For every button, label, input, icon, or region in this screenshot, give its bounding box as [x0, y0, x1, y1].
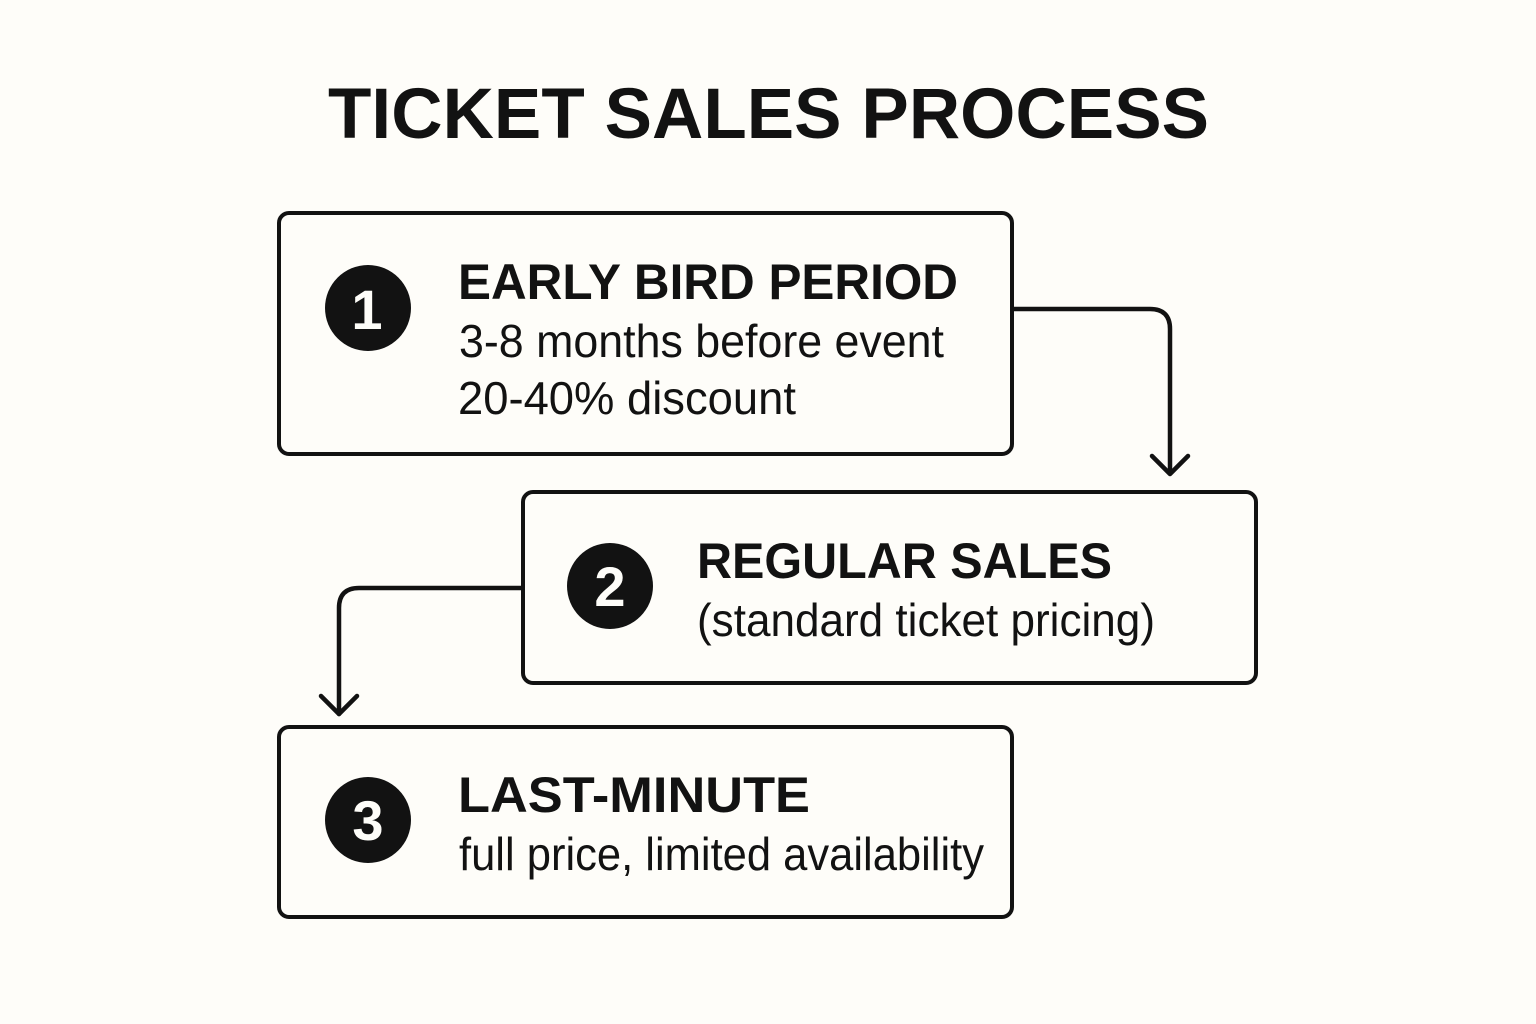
heading: early bird period: EARLY BIRD PERIOD	[458, 254, 958, 310]
panel: regular sales	[523, 492, 1256, 683]
icon: number 2	[567, 543, 653, 629]
icon: number 1	[325, 265, 411, 351]
text: pricing: (standard ticket pricing)	[697, 594, 1155, 646]
icon: number 3	[325, 777, 411, 863]
icon: number 2: 2	[594, 555, 626, 618]
icon: number 1: 1	[351, 278, 383, 341]
text: timing: 3-8 months before event	[459, 315, 944, 367]
panel: last-minute	[279, 727, 1012, 917]
icon: number 3: 3	[352, 789, 384, 852]
arrow: step 1 to step 2	[1014, 309, 1188, 474]
arrow: step 2 to step 3	[321, 588, 521, 714]
panel: early bird period	[279, 213, 1012, 454]
text: discount: 20-40% discount	[458, 372, 796, 424]
heading: regular sales: REGULAR SALES	[697, 533, 1112, 589]
title: TICKET SALES PROCESS	[328, 75, 1209, 154]
text: availability: full price, limited availability	[459, 828, 984, 880]
heading: last-minute: LAST-MINUTE	[458, 767, 810, 823]
